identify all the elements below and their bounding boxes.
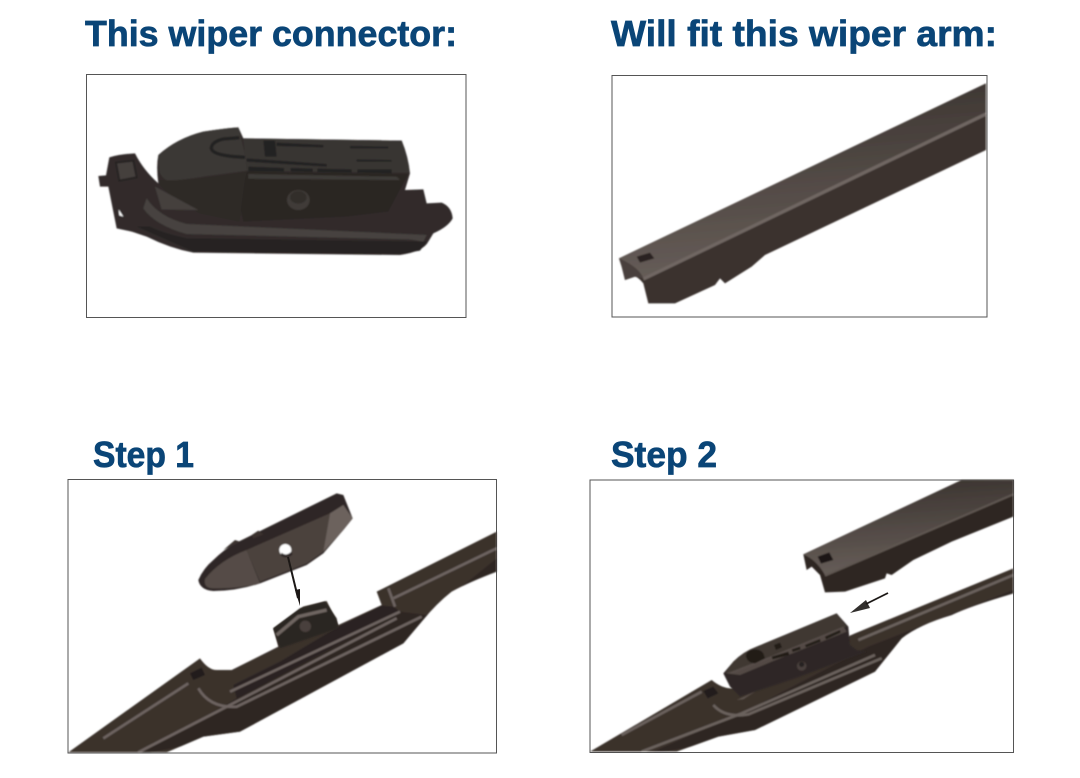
heading: this wiper connector: This wiper connector:: [85, 13, 457, 54]
illustration: wiper blade with adapter seat: [60, 525, 500, 758]
illustration: wiper connector: [98, 127, 453, 255]
panel: wiper arm: [612, 76, 987, 317]
panel: wiper connector: [86, 74, 466, 318]
illustration: blade with clip fitted: [585, 562, 1018, 758]
illustration: wiper arm sliding in: [803, 480, 1013, 592]
illustration: wiper arm: [619, 83, 986, 303]
arrow: slide arm onto clip: [850, 593, 888, 613]
heading: step 2: Step 2: [611, 434, 717, 475]
arrow: lower clip onto seat: [288, 557, 300, 606]
panel: step 2: [585, 480, 1018, 758]
illustration: adapter clip above blade: [198, 493, 353, 591]
illustration: adapter seat: [273, 602, 338, 648]
heading: step 1: Step 1: [93, 434, 194, 475]
illustration: connector seated on blade: [723, 613, 867, 700]
heading: will fit this wiper arm: Will fit this wiper arm:: [611, 13, 997, 54]
panel: step 1: [60, 480, 500, 758]
